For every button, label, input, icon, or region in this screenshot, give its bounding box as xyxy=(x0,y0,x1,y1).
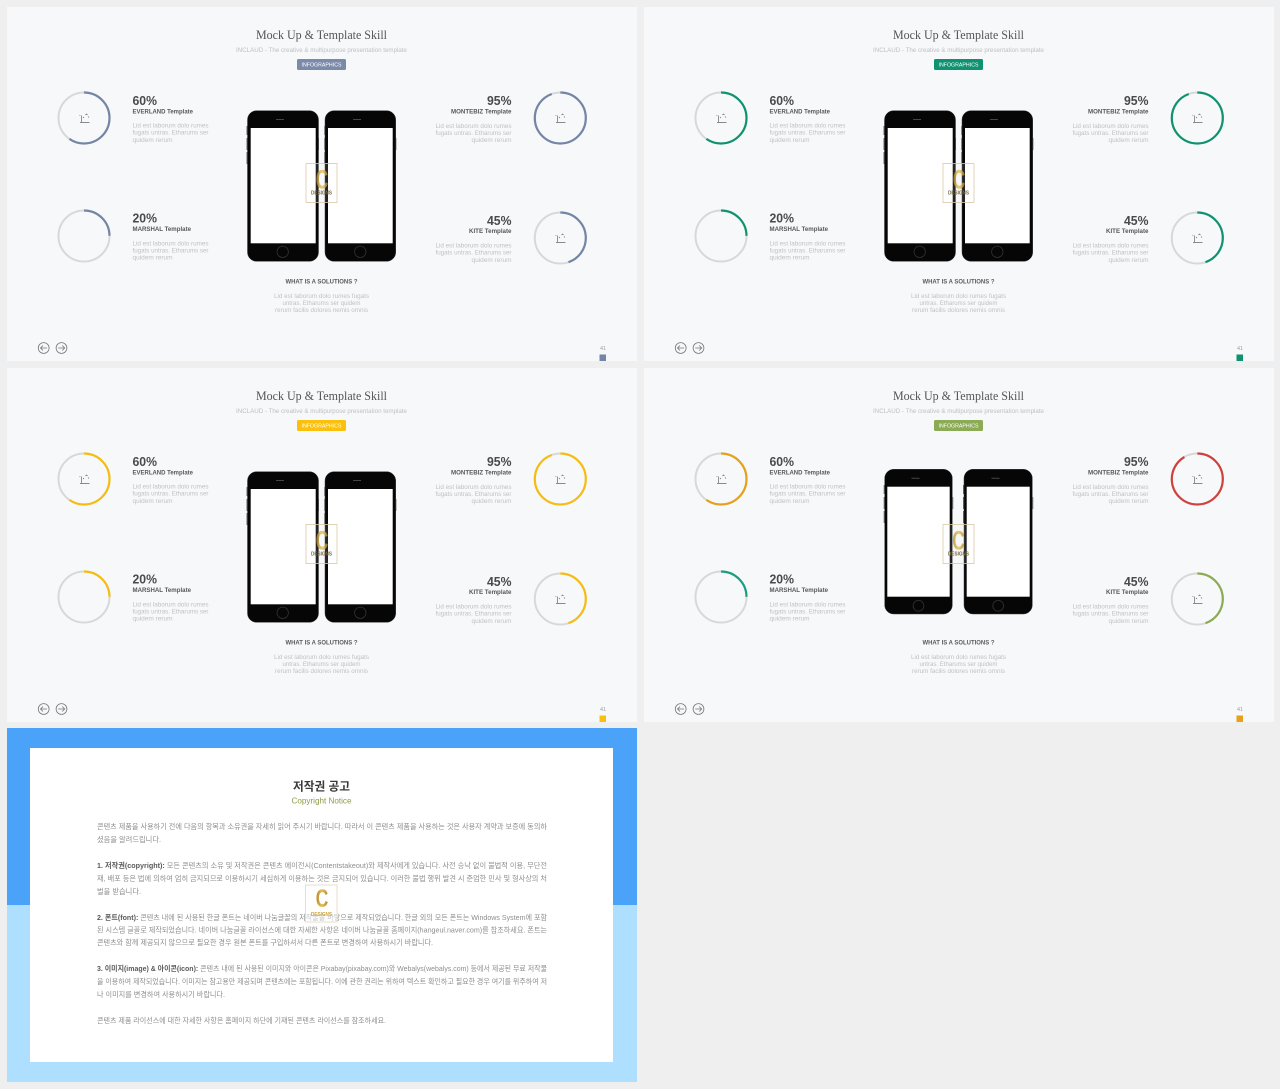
stat: marshal: MARSHAL Template xyxy=(770,227,829,233)
stat: everland: fugats untras. Etharums ser xyxy=(132,130,208,136)
watermark logo: DESIGNS xyxy=(948,552,970,558)
phone left xyxy=(246,472,319,622)
stat: marshal: quidem rerum xyxy=(132,616,172,622)
stat: montebiz: quidem rerum xyxy=(472,137,512,144)
stat: marshal xyxy=(132,573,208,622)
stat: marshal: Lid est laborum dolo rumes xyxy=(770,601,846,608)
subtitle: INCLAUD - The creative & multipurpose presentation template xyxy=(236,47,408,54)
solutions text: untras. Etharums ser quidem xyxy=(282,300,360,307)
stat: kite: KITE Template xyxy=(469,590,512,596)
stat: marshal: 20% xyxy=(132,573,157,587)
stat: montebiz: Lid est laborum dolo rumes xyxy=(436,123,512,130)
copyright title: 저작권 공고 xyxy=(293,778,350,794)
stat: marshal: quidem rerum xyxy=(770,616,810,622)
phone left xyxy=(884,469,953,614)
subtitle: INCLAUD - The creative & multipurpose presentation template xyxy=(873,47,1045,54)
stat: kite xyxy=(436,575,512,625)
stat: everland: Lid est laborum dolo rumes xyxy=(132,484,208,490)
phone right xyxy=(324,111,396,261)
stat: montebiz: fugats untras. Etharums ser xyxy=(436,130,512,137)
stat: montebiz xyxy=(1072,455,1149,505)
nav arrows xyxy=(38,704,67,714)
watermark logo: C xyxy=(316,164,328,194)
stat: everland: Lid est laborum dolo rumes xyxy=(770,484,846,490)
nav arrows xyxy=(675,343,704,353)
solutions text: rerum facilis dolores nemis omnis xyxy=(275,668,368,675)
solutions heading: WHAT IS A SOLUTIONS ? xyxy=(286,641,358,647)
section 3 image and icon: 3. 이미지(image) & 아이콘(icon): 콘텐츠 내에 된 사용된 이미지와 아이콘은 Pixabay(pixabay.com)와 Webalys(webalys.com) 등에서 제공된 무료 저작물 xyxy=(97,964,547,973)
stat: everland: EVERLAND Template xyxy=(770,110,831,116)
stat: everland: EVERLAND Template xyxy=(770,470,831,476)
watermark logo: DESIGNS xyxy=(311,912,333,918)
badge xyxy=(297,420,346,431)
phone left xyxy=(246,111,319,261)
watermark logo: C xyxy=(953,164,965,194)
title: Mock Up & Template Skill xyxy=(256,27,387,42)
stat: montebiz xyxy=(1072,94,1149,144)
stat: kite: quidem rerum xyxy=(472,618,512,625)
stat: kite: 45% xyxy=(487,214,512,228)
stat: marshal: MARSHAL Template xyxy=(132,588,192,594)
solutions text: Lid est laborum dolo rumes fugats xyxy=(274,654,369,661)
stat: everland xyxy=(132,455,208,505)
stat: kite: quidem rerum xyxy=(1108,618,1148,625)
panel: slide 2 teal xyxy=(644,7,1274,361)
donut 20% xyxy=(58,572,110,622)
solutions text: untras. Etharums ser quidem xyxy=(920,661,998,668)
stat: everland: quidem rerum xyxy=(132,137,172,144)
stat: montebiz: 95% xyxy=(1124,94,1148,108)
donut 45% with icon xyxy=(1172,574,1223,624)
watermark logo xyxy=(943,164,974,202)
stat: montebiz: quidem rerum xyxy=(1108,498,1148,505)
stat: kite: quidem rerum xyxy=(1108,257,1148,264)
stat: montebiz: MONTEBIZ Template xyxy=(451,470,512,476)
stat: kite: fugats untras. Etharums ser xyxy=(436,250,512,256)
solutions text: Lid est laborum dolo rumes fugats xyxy=(911,654,1006,661)
stat: kite: 45% xyxy=(1124,214,1148,228)
donut 60% with icon xyxy=(58,92,110,144)
phone left xyxy=(884,111,956,261)
section 2 font xyxy=(97,913,547,947)
panel: slide 4 multicolour xyxy=(644,368,1274,722)
stat: montebiz: Lid est laborum dolo rumes xyxy=(436,484,512,491)
stat: marshal: fugats untras. Etharums ser xyxy=(770,608,846,615)
stat: kite: fugats untras. Etharums ser xyxy=(436,610,512,618)
stat: montebiz: 95% xyxy=(487,455,512,469)
section 2 font: 2. 폰트(font): 콘텐츠 내에 된 사용된 한글 폰트는 네이버 나눔글꼴의 저작물을 바탕으로 제작되었습니다. 한글 외의 모든 폰트는 Windows System에 포함 xyxy=(97,913,547,922)
stat: everland: 60% xyxy=(132,94,157,108)
stat: everland: Lid est laborum dolo rumes xyxy=(132,122,208,130)
stat: montebiz: fugats untras. Etharums ser xyxy=(1072,491,1148,498)
panel: slide 1 slate xyxy=(7,7,637,361)
stat: kite: Lid est laborum dolo rumes xyxy=(436,604,512,610)
stat: montebiz: quidem rerum xyxy=(472,498,512,505)
stat: montebiz: 95% xyxy=(487,94,512,108)
stat: montebiz: fugats untras. Etharums ser xyxy=(436,491,512,498)
donut 60% with icon xyxy=(696,454,746,504)
stat: kite: KITE Template xyxy=(1106,229,1149,235)
solutions text: Lid est laborum dolo rumes fugats xyxy=(274,293,369,300)
stat: montebiz: fugats untras. Etharums ser xyxy=(1072,130,1148,137)
stat: kite: 45% xyxy=(1124,575,1148,589)
badge: INFOGRAPHICS xyxy=(302,63,342,69)
section 1 copyright: 재, 배포 등은 법에 의하여 엄히 금지되므로 이용하시기 세심하게 이용하는 것은 금지되어 있습니다. 이러한 불법 행위 발견 시 준엄한 민사 및 형사상의 처 xyxy=(97,874,547,883)
stat: everland: 60% xyxy=(770,94,794,108)
donut 45% with icon xyxy=(1172,212,1223,264)
title: Mock Up & Template Skill xyxy=(893,27,1024,42)
stat: marshal: Lid est laborum dolo rumes xyxy=(132,601,208,608)
watermark logo xyxy=(943,524,974,564)
solutions text xyxy=(911,654,1006,675)
section 2 font: 된 시스템 글꼴로 제작되었습니다. 네이버 나눔글꼴 라이선스에 대한 자세한 사항은 네이버 나눔글꼴 홈페이지(hangeul.naver.com)를 참조하세요. 폰트는 xyxy=(97,926,547,934)
stat: everland: quidem rerum xyxy=(770,498,810,505)
stat: kite: Lid est laborum dolo rumes xyxy=(436,242,512,250)
stat: kite: KITE Template xyxy=(1106,590,1149,596)
donut 45% with icon xyxy=(535,574,586,624)
donut 20% xyxy=(696,572,746,622)
title: Mock Up & Template Skill xyxy=(256,388,387,403)
solutions text xyxy=(274,293,369,314)
panel: copyright notice xyxy=(7,728,637,1082)
page number xyxy=(1236,346,1243,361)
stat: kite: Lid est laborum dolo rumes xyxy=(1072,242,1148,250)
solutions heading: WHAT IS A SOLUTIONS ? xyxy=(922,641,995,647)
solutions text: untras. Etharums ser quidem xyxy=(282,661,360,668)
nav arrows xyxy=(38,343,67,353)
solutions text xyxy=(274,654,369,675)
page number: 41 xyxy=(600,346,606,352)
stat: marshal xyxy=(132,212,208,262)
stat: everland: 60% xyxy=(132,455,157,469)
stat: montebiz: 95% xyxy=(1124,455,1148,469)
stat: everland xyxy=(770,455,846,505)
stat: kite xyxy=(1072,214,1149,264)
badge: INFOGRAPHICS xyxy=(938,63,979,69)
stat: marshal: MARSHAL Template xyxy=(770,588,829,594)
stat: everland: quidem rerum xyxy=(132,498,172,505)
stat: everland: EVERLAND Template xyxy=(132,110,194,116)
solutions heading: WHAT IS A SOLUTIONS ? xyxy=(922,280,995,286)
donut 95% with icon xyxy=(1172,454,1223,504)
stat: kite: 45% xyxy=(487,575,512,589)
watermark logo: C xyxy=(316,885,328,913)
stat: everland: 60% xyxy=(770,455,794,469)
solutions text xyxy=(911,293,1006,314)
watermark logo xyxy=(306,885,337,922)
badge xyxy=(934,59,983,70)
stat: montebiz: quidem rerum xyxy=(1108,137,1148,144)
watermark logo: DESIGNS xyxy=(311,552,333,558)
donut 20% xyxy=(696,210,746,262)
stat: montebiz: Lid est laborum dolo rumes xyxy=(1072,123,1148,130)
stat: montebiz xyxy=(436,94,512,144)
donut 95% with icon xyxy=(535,92,586,144)
section 1 copyright: 벌을 받습니다. xyxy=(97,887,141,896)
solutions text: rerum facilis dolores nemis omnis xyxy=(912,668,1005,675)
stat: marshal: 20% xyxy=(770,212,794,226)
stat: marshal: 20% xyxy=(132,212,157,226)
panel: slide 3 yellow xyxy=(7,368,637,722)
stat: kite: KITE Template xyxy=(469,229,512,235)
stat: marshal xyxy=(770,573,846,622)
badge: INFOGRAPHICS xyxy=(938,424,979,430)
stat: everland xyxy=(132,94,208,144)
intro paragraph: 셨음을 알려드립니다. xyxy=(97,835,161,844)
solutions text: rerum facilis dolores nemis omnis xyxy=(912,307,1005,314)
solutions heading: WHAT IS A SOLUTIONS ? xyxy=(286,280,358,286)
stat: kite: quidem rerum xyxy=(472,257,512,264)
section 3 image and icon: 을 이용하여 제작되었습니다. 이미지는 참고용만 제공되며 콘텐츠에는 포함됩니다. 이에 관한 권리는 위하여 텍스트 확인하고 필요한 경우 여기를 위주하여 저 xyxy=(97,977,547,986)
donut 60% with icon xyxy=(58,454,110,504)
section 3 image and icon xyxy=(97,964,547,999)
solutions text: rerum facilis dolores nemis omnis xyxy=(275,307,368,314)
page number: 41 xyxy=(1237,707,1243,713)
phone right xyxy=(963,469,1033,614)
stat: marshal: MARSHAL Template xyxy=(132,227,192,233)
stat: marshal: fugats untras. Etharums ser xyxy=(132,608,208,615)
stat: marshal: quidem rerum xyxy=(770,254,810,262)
page number xyxy=(600,707,606,722)
solutions text: untras. Etharums ser quidem xyxy=(920,300,998,307)
badge: INFOGRAPHICS xyxy=(302,424,342,430)
copyright subtitle: Copyright Notice xyxy=(292,796,352,806)
stat: marshal: quidem rerum xyxy=(132,254,172,262)
stat: montebiz: Lid est laborum dolo rumes xyxy=(1072,484,1148,491)
stat: montebiz: MONTEBIZ Template xyxy=(1088,470,1149,476)
stat: montebiz xyxy=(436,455,512,505)
stat: marshal: fugats untras. Etharums ser xyxy=(770,247,846,254)
intro paragraph: 콘텐츠 제품을 사용하기 전에 다음의 항목과 소유권을 자세히 읽어 주시기 바랍니다. 따라서 이 콘텐츠 제품을 사용하는 것은 사용자 계약과 보증에 동의하 xyxy=(97,822,547,831)
stat: everland: Lid est laborum dolo rumes xyxy=(770,122,846,130)
phone right xyxy=(961,111,1034,261)
donut 20% xyxy=(58,210,110,262)
title: Mock Up & Template Skill xyxy=(893,388,1024,403)
stat: kite: fugats untras. Etharums ser xyxy=(1072,610,1148,618)
section 2 font: 콘텐츠와 함께 제공되지 않으므로 필요한 경우 원본 폰트를 구입하셔서 다른 폰트로 변경하여 사용하시기 바랍니다. xyxy=(97,938,433,947)
solutions text: Lid est laborum dolo rumes fugats xyxy=(911,293,1006,300)
nav arrows xyxy=(675,704,704,714)
stat: everland: fugats untras. Etharums ser xyxy=(770,490,846,498)
page number: 41 xyxy=(600,707,606,713)
stat: marshal: 20% xyxy=(770,573,794,587)
watermark logo: C xyxy=(316,526,328,556)
stat: kite xyxy=(1072,575,1149,625)
section 3 image and icon: 나 이미지를 변경하여 사용하시기 바랍니다. xyxy=(97,990,225,999)
phone right xyxy=(324,472,396,622)
donut 95% with icon xyxy=(535,454,586,504)
page number xyxy=(600,346,606,361)
subtitle: INCLAUD - The creative & multipurpose presentation template xyxy=(236,408,408,415)
stat: everland xyxy=(770,94,846,144)
section 1 copyright xyxy=(97,861,547,896)
closing line: 콘텐츠 제품 라이선스에 대한 자세한 사항은 홈페이지 하단에 기재된 콘텐츠 라이선스를 참조하세요. xyxy=(97,1016,386,1025)
donut 45% with icon xyxy=(535,212,586,264)
stat: marshal: fugats untras. Etharums ser xyxy=(132,247,208,254)
stat: montebiz: MONTEBIZ Template xyxy=(1088,110,1149,116)
donut 95% with icon xyxy=(1172,92,1223,144)
watermark logo: DESIGNS xyxy=(311,190,333,196)
subtitle: INCLAUD - The creative & multipurpose presentation template xyxy=(873,408,1045,415)
stat: everland: fugats untras. Etharums ser xyxy=(770,130,846,136)
stat: kite xyxy=(436,214,512,264)
stat: everland: EVERLAND Template xyxy=(132,470,194,476)
watermark logo xyxy=(306,524,337,564)
stat: marshal: Lid est laborum dolo rumes xyxy=(132,240,208,247)
stat: kite: fugats untras. Etharums ser xyxy=(1072,250,1148,256)
watermark logo: C xyxy=(952,526,965,556)
intro paragraph xyxy=(97,822,547,844)
page number xyxy=(1236,707,1243,722)
donut 60% with icon xyxy=(696,92,746,144)
section 1 copyright: 1. 저작권(copyright): 모든 콘텐츠의 소유 및 저작권은 콘텐츠 에이전시(Contentstakeout)와 제작사에게 있습니다. 사전 승낙 없이 불법적 이용, 무단전 xyxy=(97,861,547,870)
badge xyxy=(297,59,346,70)
stat: marshal: Lid est laborum dolo rumes xyxy=(770,240,846,247)
stat: montebiz: MONTEBIZ Template xyxy=(451,110,512,116)
stat: marshal xyxy=(770,212,846,262)
stat: kite: Lid est laborum dolo rumes xyxy=(1072,604,1148,610)
watermark logo: DESIGNS xyxy=(948,190,970,196)
stat: everland: quidem rerum xyxy=(770,137,810,144)
stat: everland: fugats untras. Etharums ser xyxy=(132,490,208,498)
watermark logo xyxy=(306,164,337,202)
badge xyxy=(934,420,983,431)
page number: 41 xyxy=(1237,346,1243,352)
